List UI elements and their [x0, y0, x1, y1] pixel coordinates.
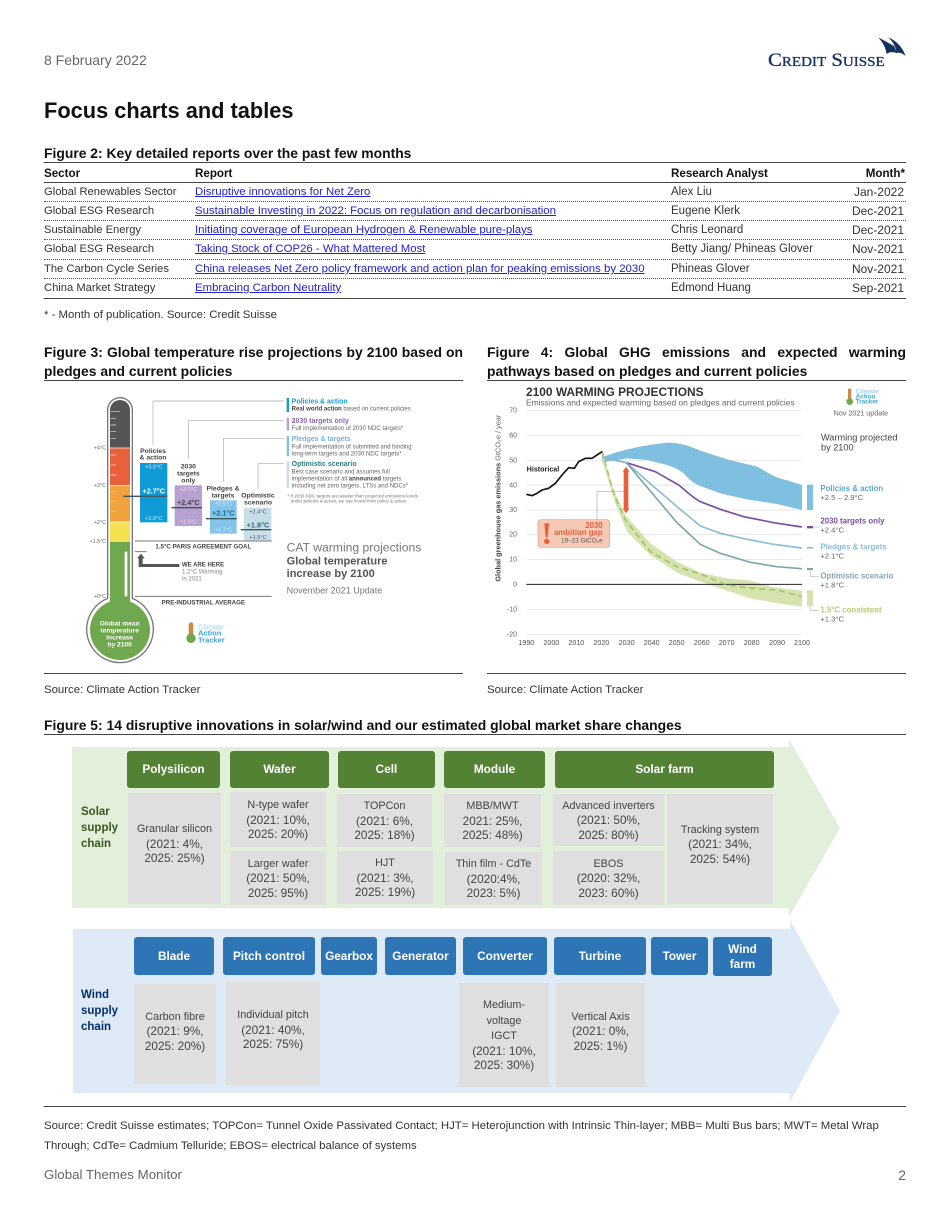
- table: key reports: The Carbon Cycle Series: [44, 263, 169, 275]
- axes: 2060: [694, 639, 710, 647]
- table: key reports: Initiating coverage of European Hydrogen & Renewable pure-plays: [195, 224, 532, 236]
- scenario bars: scenario: [244, 500, 272, 507]
- axes: 50: [509, 457, 517, 464]
- we are here marker: in 2021: [182, 577, 202, 583]
- legend: under policies & action, we use levels from policy & action: [291, 499, 407, 504]
- scenario bars: Policies: [140, 448, 166, 455]
- legend: Best case scenario and assumes full: [292, 469, 390, 475]
- thermometer: +2°C: [94, 520, 106, 526]
- right-hand scenario labels: 1.5°C consistent: [820, 606, 882, 615]
- solar innovation cells: HJT: [375, 857, 395, 869]
- table: key reports: Sustainable Energy: [44, 224, 141, 236]
- axes: 0: [513, 582, 517, 589]
- ambition gap callout: 19–23 GtCO₂e: [561, 538, 603, 545]
- axes: -20: [507, 632, 517, 639]
- chart title: [526, 385, 795, 407]
- scenario bars: Pledges &: [206, 485, 240, 492]
- scenario bars: 2030: [181, 463, 196, 470]
- solar innovation cells: 2025: 80%): [578, 828, 639, 842]
- solar innovation cells: 2025: 18%): [354, 828, 415, 842]
- Climate Action Tracker logo: Tracker: [198, 635, 225, 644]
- table: key reports: Phineas Glover: [671, 263, 750, 275]
- table source note: * - Month of publication. Source: Credit Suisse: [44, 309, 277, 321]
- legend: Full implementation of submitted and binding: [292, 444, 412, 450]
- scenario bars: +2.4°C: [177, 498, 200, 507]
- Climate Action Tracker logo: [186, 622, 225, 644]
- solar stage headers: Cell: [376, 762, 397, 776]
- solar innovation cells: 2025: 20%): [248, 827, 308, 841]
- right-hand scenario labels: +2.4°C: [820, 526, 845, 535]
- wind innovation cells: 2025: 30%): [474, 1058, 534, 1072]
- scenario bars: Optimistic: [241, 493, 275, 500]
- figure 5 source note: Source: Credit Suisse estimates; TOPCon= Tunnel Oxide Passivated Contact; HJT= Heterojunction with Intrinsic Thin-layer; MBB= Multi Bus bars; MWT= Metal Wrap Through; CdTe= Cadmium Telluride; EBOS= electrical balance of systems: [44, 1120, 879, 1152]
- scenario bars: +2.7°C: [142, 486, 166, 495]
- table: key reports: Dec-2021: [852, 223, 904, 237]
- solar innovation cells: (2021: 4%,: [146, 837, 203, 851]
- scenario bars: +1.7°C: [215, 527, 232, 533]
- wind innovation cells: Carbon fibre: [145, 1011, 205, 1023]
- axes: 30: [509, 507, 517, 514]
- axes: 2080: [744, 639, 760, 647]
- solar innovation cells: (2021: 50%,: [577, 813, 640, 827]
- wind innovation cells: voltage: [487, 1015, 521, 1027]
- date: 8 February 2022: [44, 52, 147, 68]
- axes: 60: [509, 432, 517, 439]
- solar label: Solar: [81, 806, 110, 818]
- table: key reports: Research Analyst: [671, 167, 768, 180]
- CAT caption: Global temperature: [287, 555, 388, 567]
- wind label: Wind: [81, 989, 109, 1001]
- CAT caption: [287, 541, 421, 596]
- CAT caption: November 2021 Update: [287, 586, 382, 596]
- legend: implementation of all announced targets: [292, 477, 401, 483]
- legend: Policies & action: [292, 399, 348, 406]
- paris goal and pre-industrial lines: 1.5°C PARIS AGREEMENT GOAL: [155, 543, 251, 550]
- right-hand scenario labels: Pledges & targets: [820, 543, 887, 552]
- scenario lines: [526, 451, 802, 597]
- wind innovation cells: (2021: 10%,: [472, 1044, 536, 1058]
- wind stage headers: Wind: [728, 942, 757, 956]
- scenario bars: +2.6°C: [215, 502, 232, 508]
- wind innovation cells: Vertical Axis: [571, 1011, 630, 1023]
- solar innovation cells: 2023: 5%): [467, 886, 520, 900]
- right-hand scenario labels: Optimistic scenario: [820, 571, 893, 580]
- solar stage headers: [127, 751, 774, 788]
- table: key reports: Dec-2021: [852, 204, 904, 218]
- wind stage headers: Pitch control: [233, 949, 305, 963]
- scenario bars: +1.9°C: [180, 520, 197, 526]
- axes: -10: [507, 607, 517, 614]
- we are here marker: [135, 552, 224, 583]
- wind innovation cells: (2021: 0%,: [572, 1024, 629, 1038]
- table: key reports: Jan-2022: [854, 185, 904, 199]
- wind stage headers: Blade: [158, 949, 190, 963]
- logo: Credit Suisse: Credit Suisse: [768, 50, 885, 71]
- solar innovation cells: (2020: 32%,: [577, 871, 640, 885]
- axes: 1990: [518, 639, 534, 647]
- scenario bars: +2.0°C: [145, 516, 162, 522]
- solar innovation cells: (2021: 34%,: [688, 837, 752, 851]
- wind label: chain: [81, 1021, 111, 1033]
- table: key reports: Nov-2021: [852, 262, 904, 276]
- figure 4 source: Source: Climate Action Tracker: [487, 684, 643, 696]
- right-hand scenario labels: 2030 targets only: [820, 517, 885, 526]
- chart title: 2100 WARMING PROJECTIONS: [526, 385, 704, 399]
- thermometer: by 2100: [107, 642, 132, 649]
- leader lines: [153, 401, 284, 489]
- wind label: [81, 989, 118, 1033]
- table: key reports: Global Renewables Sector: [44, 186, 176, 198]
- CAT logo and update: Climate: [856, 389, 879, 396]
- wind stage headers: Turbine: [579, 949, 621, 963]
- solar stage headers: Solar farm: [635, 762, 694, 776]
- wind innovation cells: (2021: 9%,: [146, 1024, 204, 1038]
- table: key reports: Chris Leonard: [671, 224, 743, 236]
- axes: 2100: [794, 639, 810, 647]
- wind stage headers: farm: [730, 956, 755, 970]
- right-hand scenario labels: Policies & action: [820, 484, 883, 493]
- solar innovation cells: Tracking system: [681, 824, 759, 836]
- paris goal and pre-industrial lines: PRE-INDUSTRIAL AVERAGE: [162, 599, 245, 606]
- solar label: [81, 806, 118, 850]
- policies and action band: [602, 443, 802, 510]
- axes: 2090: [769, 639, 785, 647]
- legend: Real world action based on current policies: [292, 407, 411, 413]
- 1.5C consistent band: [602, 451, 802, 607]
- scenario bars: +2.4°C: [249, 509, 267, 515]
- solar innovation cells: (2020:4%,: [467, 872, 520, 886]
- right-hand scenario labels: +1.3°C: [820, 614, 845, 623]
- axes: 2020: [593, 639, 609, 647]
- axes: 2050: [669, 639, 685, 647]
- figure 4 title: pathways based on pledges and current policies: [487, 363, 807, 379]
- paris goal and pre-industrial lines: [135, 541, 272, 606]
- solar innovation cells: 2025: 54%): [690, 852, 750, 866]
- scenario bars: & action: [140, 455, 166, 462]
- Climate Action Tracker logo: Climate: [198, 622, 223, 631]
- thermometer: Global mean: [100, 620, 140, 627]
- axes: Global greenhouse gas emissions GtCO₂e / year: [494, 414, 503, 582]
- right-hand scenario labels: +2.5 – 2.9°C: [820, 493, 864, 502]
- legend: [287, 398, 419, 504]
- scenario bars: only: [181, 478, 196, 485]
- solar innovation cells: MBB/MWT: [466, 800, 519, 812]
- chart: 2100 warming projections: [494, 385, 898, 647]
- table: key reports: Sector: [44, 167, 80, 180]
- table: key reports: [44, 162, 906, 299]
- figure 3 source: [44, 673, 463, 696]
- solar innovation cells: 2021: 25%,: [463, 814, 522, 828]
- we are here marker: 1.2°C Warming: [182, 569, 223, 575]
- CAT caption: increase by 2100: [287, 568, 375, 580]
- solar innovation cells: Granular silicon: [137, 823, 212, 835]
- solar innovation cells: (2021: 50%,: [246, 871, 310, 885]
- axes: 40: [509, 482, 517, 489]
- solar innovation cells: N-type wafer: [247, 799, 309, 811]
- CAT caption: CAT warming projections: [287, 541, 421, 555]
- axes: 2000: [543, 639, 559, 647]
- table: key reports: Report: [195, 167, 232, 180]
- solar stage headers: Wafer: [263, 762, 296, 776]
- solar innovation cells: (2021: 6%,: [356, 814, 413, 828]
- ambition gap callout: [538, 520, 610, 547]
- solar innovation cells: (2021: 3%,: [356, 871, 414, 885]
- panel: solar supply chain: [72, 739, 840, 917]
- solar innovation cells: 2025: 25%): [144, 851, 205, 865]
- historical label: Historical: [527, 466, 559, 474]
- axes: 2040: [644, 639, 660, 647]
- CAT logo and update: Nov 2021 update: [834, 409, 888, 417]
- scenario bars: +2.1°C: [212, 509, 235, 518]
- figure 3 title: pledges and current policies: [44, 363, 232, 379]
- solar stage headers: Module: [474, 762, 515, 776]
- Climate Action Tracker logo: Action: [198, 629, 222, 638]
- figure 4 source: [487, 673, 906, 696]
- thermometer: temperature: [100, 628, 139, 635]
- page number: 2: [898, 1167, 906, 1183]
- wind innovation cells: 2025: 75%): [243, 1037, 303, 1051]
- table: key reports: China Market Strategy: [44, 282, 155, 294]
- wind stage headers: [134, 937, 772, 976]
- legend: * If 2030 NDC targets are weaker than projected emissions levels: [287, 494, 419, 499]
- figure 2 title: Figure 2: Key detailed reports over the past few months: [44, 145, 411, 161]
- legend: Pledges & targets: [292, 436, 351, 443]
- right-hand scenario labels: +1.8°C: [820, 580, 845, 589]
- solar innovation cells: TOPCon: [364, 800, 405, 812]
- wind stage headers: Tower: [663, 949, 696, 963]
- figure 3 title: Figure 3: Global temperature rise projections by 2100 based on: [44, 344, 463, 360]
- scenario bars: +1.5°C: [249, 535, 267, 541]
- thermometer: increase: [106, 635, 133, 642]
- scenario bars: targets: [177, 471, 200, 478]
- table: key reports: Global ESG Research: [44, 243, 154, 255]
- logo: Credit Suisse: [768, 37, 906, 71]
- ambition gap arrow: [597, 467, 629, 519]
- solar innovation cells: 2025: 19%): [355, 885, 415, 899]
- thermometer: +0°C: [94, 594, 106, 600]
- footer title: Global Themes Monitor: [44, 1167, 182, 1182]
- wind arrow background: [73, 920, 840, 1102]
- solar innovation cells: Advanced inverters: [562, 800, 655, 812]
- scenario bars: +1.8°C: [247, 520, 270, 529]
- wind stage headers: Gearbox: [325, 949, 373, 963]
- legend: including net zero targets, LTSs and NDCs*: [292, 484, 409, 490]
- axes: 10: [509, 557, 517, 564]
- wind innovation cells: 2025: 1%): [574, 1039, 627, 1053]
- ambition gap callout: ambition gap: [554, 528, 603, 537]
- solar innovation cells: 2025: 95%): [248, 886, 308, 900]
- solar label: supply: [81, 822, 118, 834]
- figure 4 title: Figure 4: Global GHG emissions and expected warming: [487, 344, 906, 360]
- table: key reports: Embracing Carbon Neutrality: [195, 282, 341, 294]
- we are here marker: WE ARE HERE: [182, 563, 224, 569]
- solar stage headers: Polysilicon: [142, 762, 205, 776]
- figure 5 source note: [44, 1106, 906, 1156]
- warming projected heading: by 2100: [821, 443, 854, 453]
- legend: 2030 targets only: [292, 418, 349, 425]
- figure 4 title: [487, 344, 906, 379]
- table: key reports: Eugene Klerk: [671, 205, 740, 217]
- table: key reports: China releases Net Zero policy framework and action plan for peaking emissions by 2030: [195, 263, 645, 275]
- wind innovation cells: 2025: 20%): [145, 1039, 205, 1053]
- wind stage headers: Generator: [392, 949, 449, 963]
- wind innovation cells: Individual pitch: [237, 1009, 309, 1021]
- solar innovation cells: (2021: 10%,: [246, 813, 310, 827]
- scenario bars: [123, 448, 275, 541]
- legend: Full implementation of 2030 NDC targets*: [292, 426, 404, 432]
- axes: 70: [509, 408, 517, 415]
- table: key reports: Taking Stock of COP26 - What Mattered Most: [195, 243, 425, 255]
- table: key reports: Month*: [866, 167, 905, 180]
- thermometer: +3°C: [94, 483, 106, 489]
- figure 3 source: Source: Climate Action Tracker: [44, 684, 200, 696]
- right-hand scenario labels: [807, 484, 893, 623]
- warming projected heading: [821, 433, 898, 453]
- ambition gap callout: 2030: [585, 521, 603, 530]
- chart title: Emissions and expected warming based on pledges and current policies: [526, 397, 795, 407]
- scenario bars: targets: [212, 493, 235, 500]
- table: key reports: Sustainable Investing in 2022: Focus on regulation and decarbonisation: [195, 205, 556, 217]
- CAT logo and update: Tracker: [856, 399, 879, 406]
- legend: long-term targets and 2030 NDC targets*: [292, 451, 402, 457]
- table: key reports: Alex Liu: [671, 186, 712, 198]
- solar innovation cells: EBOS: [593, 858, 624, 870]
- axes: [494, 408, 810, 647]
- solar innovation cells: Thin film - CdTe: [456, 858, 531, 870]
- table: key reports: Global ESG Research: [44, 205, 154, 217]
- solar label: chain: [81, 838, 111, 850]
- table: key reports: Betty Jiang/ Phineas Glover: [671, 243, 813, 255]
- figure 3 title: [44, 344, 463, 379]
- scenario bars: +3.0°C: [180, 487, 197, 493]
- wind stage headers: Converter: [477, 949, 533, 963]
- CAT logo and update: [834, 388, 888, 417]
- thermometer: [87, 398, 153, 663]
- wind label: supply: [81, 1005, 118, 1017]
- solar arrow background: [72, 739, 840, 917]
- zero line: [526, 583, 802, 586]
- legend: Optimistic scenario: [292, 461, 357, 468]
- warming projected heading: Warming projected: [821, 433, 898, 443]
- table: key reports: Edmond Huang: [671, 282, 751, 294]
- axes: 2070: [719, 639, 735, 647]
- solar innovation cells: 2025: 48%): [462, 828, 523, 842]
- solar innovation cells: [128, 792, 773, 905]
- solar innovation cells: 2023: 60%): [578, 886, 639, 900]
- thermometer: +4°C: [94, 445, 106, 451]
- scenario bars: +3.6°C: [145, 465, 162, 471]
- axes: 2010: [568, 639, 584, 647]
- right-hand scenario labels: +2.1°C: [820, 552, 845, 561]
- thermometer: +1.5°C: [90, 539, 106, 545]
- figure 5 title: Figure 5: 14 disruptive innovations in solar/wind and our estimated global market share changes: [44, 717, 682, 733]
- chart: thermometer warming projections: [86, 397, 421, 664]
- wind innovation cells: (2021: 40%,: [241, 1023, 305, 1037]
- solar innovation cells: Larger wafer: [248, 858, 308, 870]
- axes: 20: [509, 532, 517, 539]
- CAT logo and update: Action: [856, 394, 875, 401]
- table: key reports: Nov-2021: [852, 242, 904, 256]
- table: key reports: Disruptive innovations for Net Zero: [195, 186, 370, 198]
- table: key reports: Sep-2021: [852, 281, 904, 295]
- wind innovation cells: Medium-: [483, 999, 525, 1011]
- wind innovation cells: IGCT: [491, 1030, 517, 1042]
- page heading: Focus charts and tables: [44, 98, 294, 123]
- axes: 2030: [619, 639, 635, 647]
